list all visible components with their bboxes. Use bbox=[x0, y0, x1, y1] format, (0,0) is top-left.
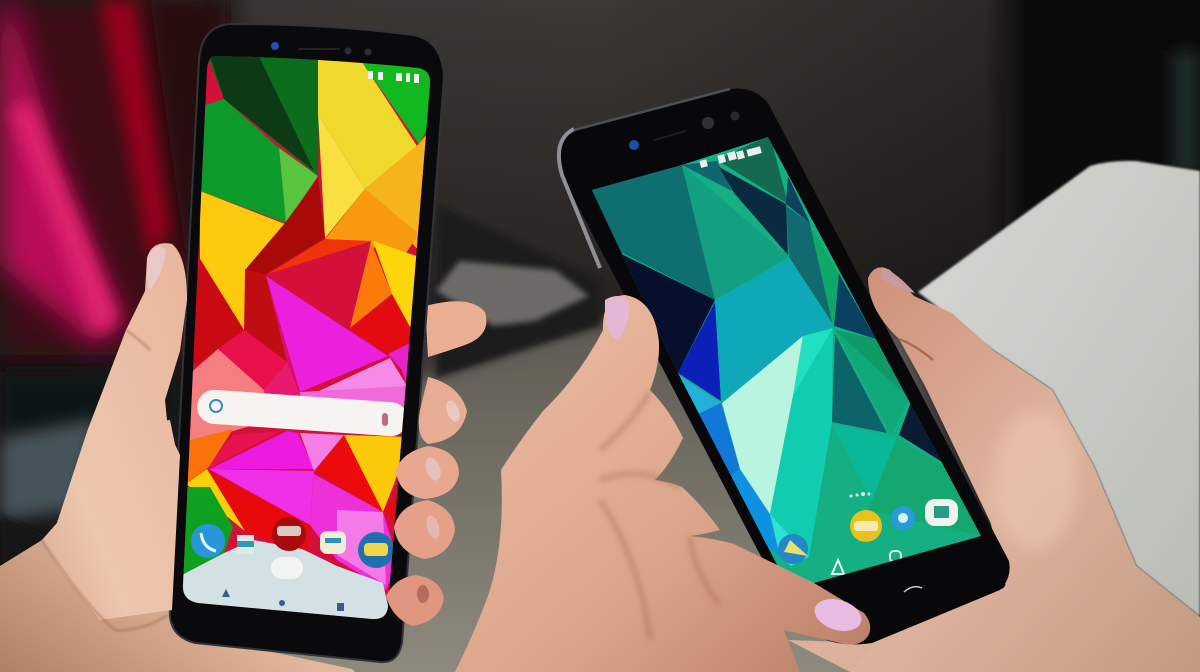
left hand creases bbox=[42, 330, 168, 630]
search bar bbox=[196, 389, 409, 437]
left hand: ring finger bbox=[396, 446, 459, 499]
speaker bbox=[298, 48, 340, 50]
top edge highlight bbox=[574, 89, 730, 130]
phone body bbox=[170, 24, 444, 662]
right thumb nail bbox=[881, 267, 915, 293]
status bar marks bbox=[368, 71, 419, 83]
front camera bbox=[702, 117, 714, 129]
centre hand fold shading bbox=[600, 392, 720, 640]
search logo bbox=[210, 400, 222, 412]
left little nail bbox=[424, 514, 442, 540]
centre finger nail bbox=[811, 594, 865, 636]
home key bbox=[904, 587, 922, 592]
white table bbox=[918, 161, 1200, 617]
dock tray bbox=[180, 540, 392, 625]
left thumb nail bbox=[147, 246, 166, 290]
right phone bbox=[557, 89, 1010, 645]
blue sensor bbox=[629, 140, 639, 150]
phone body bbox=[557, 89, 1010, 645]
right palm highlight bbox=[993, 410, 1077, 550]
page dots bbox=[850, 492, 870, 498]
left ring nail bbox=[422, 455, 444, 483]
earpiece bbox=[654, 131, 686, 140]
front camera bbox=[271, 42, 279, 50]
right hand: body behind phone bbox=[788, 390, 1200, 672]
sensors bbox=[344, 48, 372, 56]
app icons bbox=[778, 499, 958, 574]
centre hand: palm, thumb and back fingers bbox=[455, 295, 870, 672]
mic icon bbox=[382, 413, 388, 426]
left fifth nail bbox=[417, 585, 429, 603]
status bar marks bbox=[699, 146, 762, 168]
right hand web fold bbox=[899, 339, 933, 360]
dock app icons bbox=[191, 517, 394, 579]
screen wallpaper bbox=[182, 56, 430, 620]
left hand: thumb bbox=[42, 243, 187, 620]
left hand: palm behind phone bbox=[0, 420, 355, 672]
second sensor bbox=[730, 112, 740, 120]
screen wallpaper bbox=[592, 137, 981, 583]
left phone bbox=[170, 24, 444, 662]
centre thumb nail bbox=[605, 296, 629, 340]
right hand: thumb and heel bbox=[850, 267, 1200, 672]
left hand: middle finger bbox=[419, 377, 467, 444]
silver edge highlight bbox=[559, 129, 600, 268]
navigation marks bbox=[222, 589, 344, 611]
left middle nail bbox=[444, 399, 462, 423]
left hand: fifth finger bbox=[386, 575, 444, 626]
left hand: index finger bbox=[425, 301, 486, 357]
left hand: little finger bbox=[394, 500, 455, 559]
